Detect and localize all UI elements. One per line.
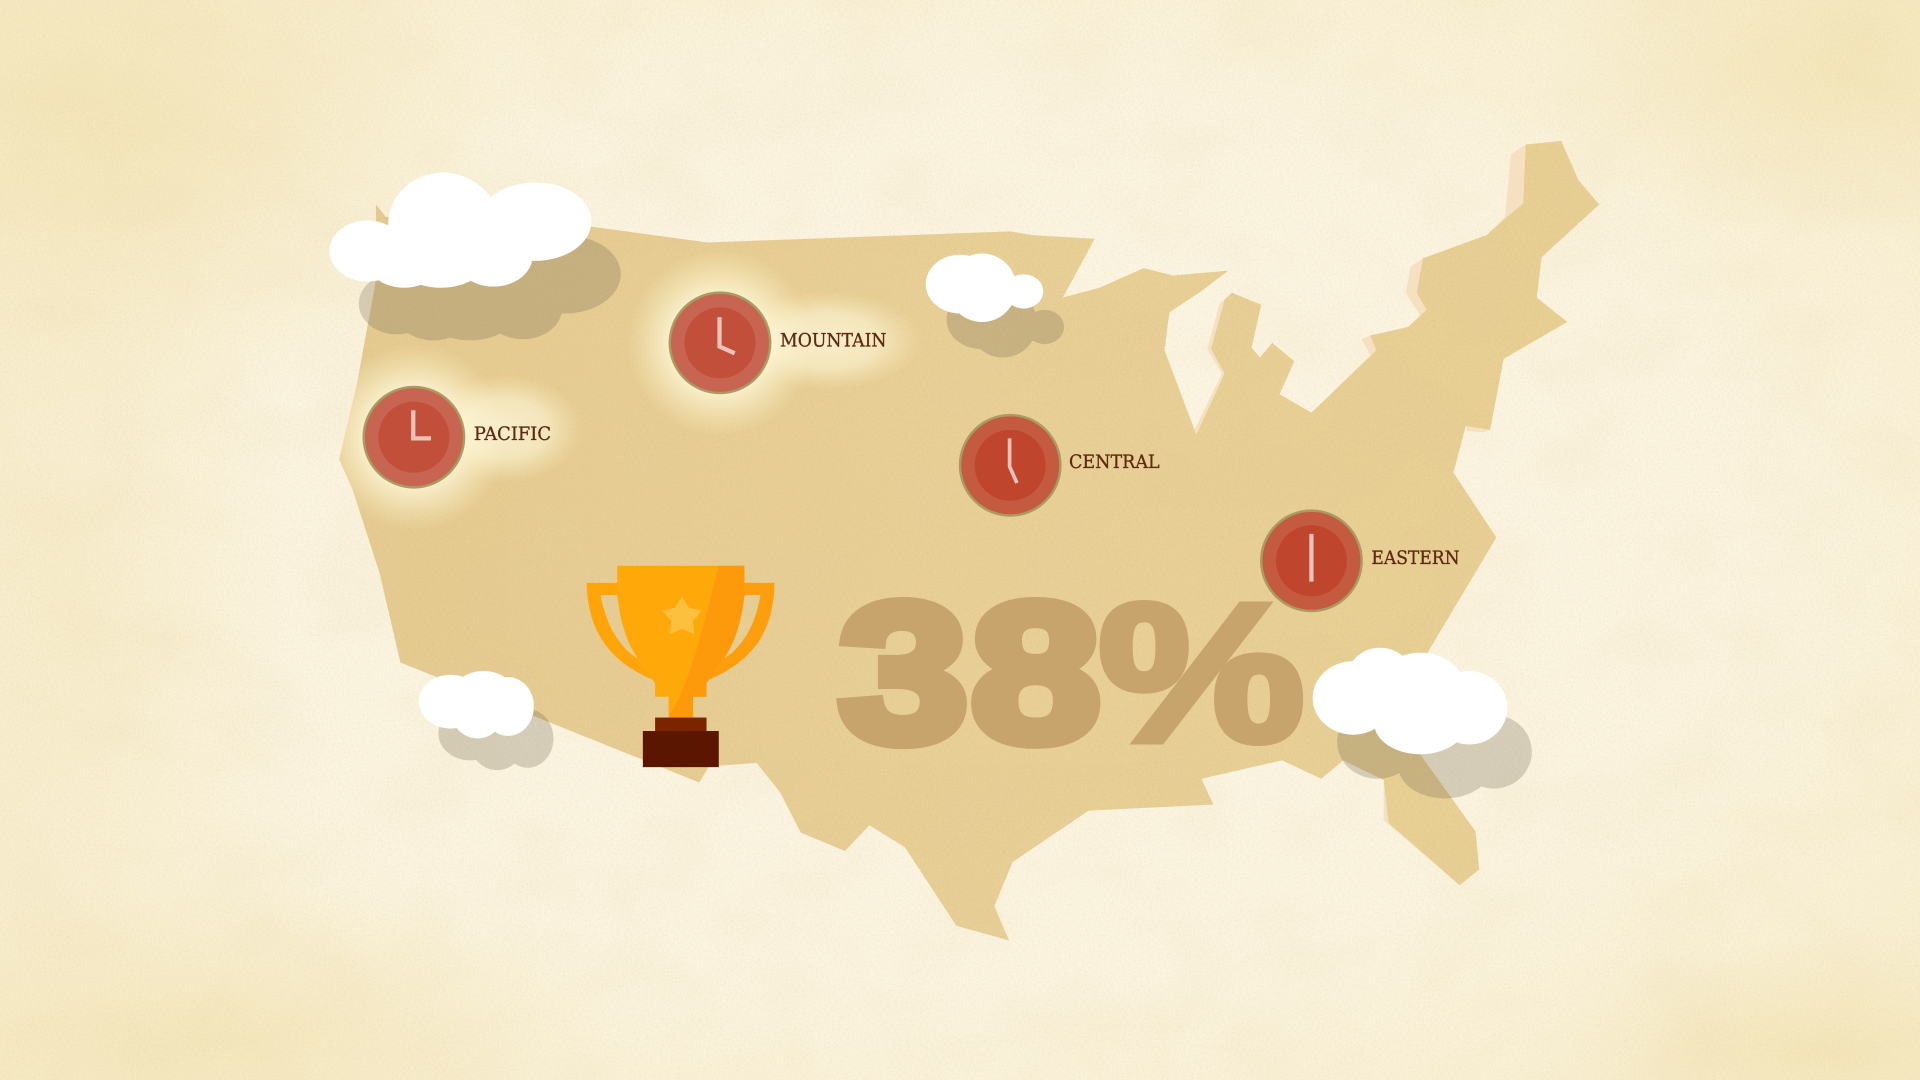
cloud shadow: southwest xyxy=(438,703,553,770)
map lighter edge shading xyxy=(1194,144,1526,885)
trophy star xyxy=(662,596,702,634)
glow behind highlighted zones xyxy=(321,250,922,530)
clock: Eastern xyxy=(1260,509,1363,612)
cloud: southwest xyxy=(419,671,534,738)
large statistic: % xyxy=(1098,563,1305,783)
trophy base xyxy=(655,718,707,733)
label: Mountain: MOUNTAIN xyxy=(780,330,887,352)
cloud shadow: northwest xyxy=(359,225,621,340)
icon: trophy xyxy=(587,566,774,767)
trophy cup xyxy=(617,566,744,718)
zone labels xyxy=(474,330,1460,569)
cloud shadow: southeast xyxy=(1337,692,1532,798)
label: Central: CENTRAL xyxy=(1069,451,1160,473)
large statistic: 38 xyxy=(839,563,1100,783)
label: Pacific: PACIFIC xyxy=(474,423,551,445)
trophy cup shading xyxy=(669,566,744,718)
cloud shadow: northeast xyxy=(947,289,1064,358)
trophy handles xyxy=(587,583,653,680)
cloud: northwest xyxy=(329,173,591,288)
map of the United States xyxy=(339,140,1599,940)
label: Eastern: EASTERN xyxy=(1371,547,1460,569)
map land shape xyxy=(339,141,1599,940)
clock: Central xyxy=(959,414,1062,517)
clock: Pacific xyxy=(362,386,465,489)
cloud: northeast xyxy=(926,253,1043,322)
clock: Mountain xyxy=(669,291,771,394)
cloud: southeast xyxy=(1313,648,1507,754)
